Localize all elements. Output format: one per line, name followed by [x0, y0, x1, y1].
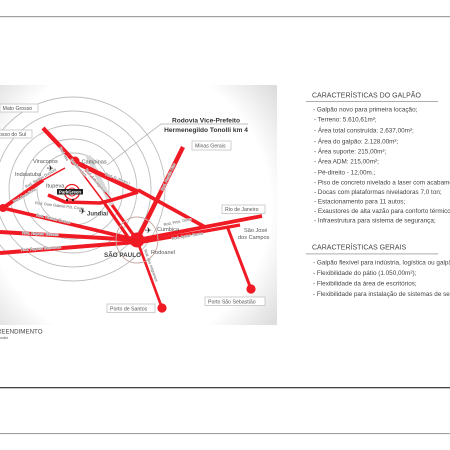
road labels: Rod. Fernão Dias [160, 163, 177, 191]
road labels: Rod. Santos Dumont [24, 167, 58, 189]
metro area shading [88, 156, 112, 205]
city labels: São José [244, 228, 267, 234]
map caption [0, 328, 43, 340]
city labels bold: SÃO PAULO [104, 250, 141, 259]
galpão list: - Área suporte: 215,00m²; [314, 146, 387, 156]
city labels: Rodoanel [151, 250, 175, 256]
gerais list [313, 260, 450, 298]
city labels: Indaiatuba [15, 172, 42, 178]
site leader line [107, 124, 248, 165]
site marker: ParkGreen [59, 189, 81, 194]
city labels: Viracopos [33, 159, 58, 165]
gerais list: - Flexibilidade da área de escritórios; [313, 280, 417, 288]
label: Porto São Sebastião: Porto São Sebastião [208, 300, 256, 306]
city labels: Campinas [82, 160, 107, 166]
road labels: Rod. Castelo Branco [36, 213, 71, 225]
road labels [12, 146, 204, 282]
panel: características gerais [306, 242, 450, 298]
city labels: dos Campos [238, 235, 270, 241]
top rule [0, 16, 450, 17]
galpão list: - Área do galpão: 2.128,00m²; [314, 136, 399, 146]
bottom rule [0, 433, 450, 434]
label: Mato Grosso: Mato Grosso [2, 106, 32, 112]
city labels: Cumbica [157, 227, 180, 233]
red road network [0, 128, 262, 308]
road labels: Rod. Ayrton Senna [171, 231, 204, 241]
lower dark rule [0, 387, 450, 388]
galpão list [313, 106, 450, 224]
city nodes [0, 156, 256, 313]
heading: gerais: CARACTERÍSTICAS GERAIS [312, 242, 406, 252]
galpão list: - Infraestrutura para sistema de segurança; [314, 218, 436, 224]
site marker [57, 184, 83, 201]
road labels: Rod. Raposo Tavares [22, 231, 59, 237]
road labels: Rod. Dom Gabriel P.B. Couto [35, 201, 84, 211]
panel background [0, 85, 277, 325]
road labels: Bandeirantes [69, 158, 87, 177]
galpão list: - Terreno: 5.610,61m²; [314, 116, 377, 124]
road labels: Rod.Castelinho [12, 187, 37, 204]
airport icons: ✈ [145, 226, 152, 235]
label: Minas Gerais [192, 141, 231, 150]
label: Minas Gerais: Minas Gerais [195, 144, 226, 150]
city labels bold: Jundiaí [87, 212, 108, 218]
galpão list: - Estacionamento para 11 autos; [314, 198, 405, 206]
São Paulo hub and beltway [116, 217, 158, 263]
map panel [0, 85, 277, 325]
gerais list: - Flexibilidade do pátio (1.050,00m²); [313, 270, 417, 277]
label: Porto de Santos: Porto de Santos [110, 306, 148, 312]
galpão list: - Pé-direito - 12,00m.; [314, 170, 376, 176]
label: Porto São Sebastião [205, 297, 265, 306]
galpão list: - Docas com plataformas niveladoras 7,0 ton; [314, 189, 442, 196]
label: Mato Grosso do Sul [0, 130, 32, 138]
site road title [164, 118, 248, 134]
city labels: Itupeva [46, 184, 65, 190]
galpão list: - Área ADM: 215,00m²; [314, 156, 379, 166]
galpão list: - Exaustores de alta vazão para conforto térmico; [314, 208, 450, 215]
concentric distance rings [0, 97, 165, 281]
airport icons [47, 164, 152, 235]
panel: características do galpão [306, 90, 450, 224]
city labels [15, 159, 270, 256]
airport icons: ✈ [79, 207, 86, 216]
road labels: Rod. D. Pedro I [105, 172, 130, 186]
city labels bold [87, 212, 141, 259]
road labels: Rod. dos Imigrantes [143, 249, 158, 282]
label: Rio de Janeiro [222, 205, 265, 214]
site road title: Hermenegildo Tonolli km 4 [164, 127, 248, 134]
road labels: Rod. Raposo Bitencourt [21, 245, 62, 252]
heading: galpão: CARACTERÍSTICAS DO GALPÃO [312, 90, 421, 100]
road labels: Rod. Pres. Dutra [163, 217, 193, 227]
galpão list: - Área total construída: 2.637,00m²; [314, 126, 414, 134]
label: Mato Grosso [0, 104, 38, 112]
label: Rio de Janeiro: Rio de Janeiro [225, 207, 259, 213]
road labels: Rod. dos [58, 146, 69, 162]
site road title: Rodovia Vice-Prefeito [172, 118, 240, 124]
galpão list: - Galpão novo para primeira locação; [313, 106, 418, 114]
label: Porto de Santos [107, 304, 155, 312]
road labels: Rod. Anhanguera [84, 168, 107, 194]
airport icons: ✈ [47, 164, 54, 173]
